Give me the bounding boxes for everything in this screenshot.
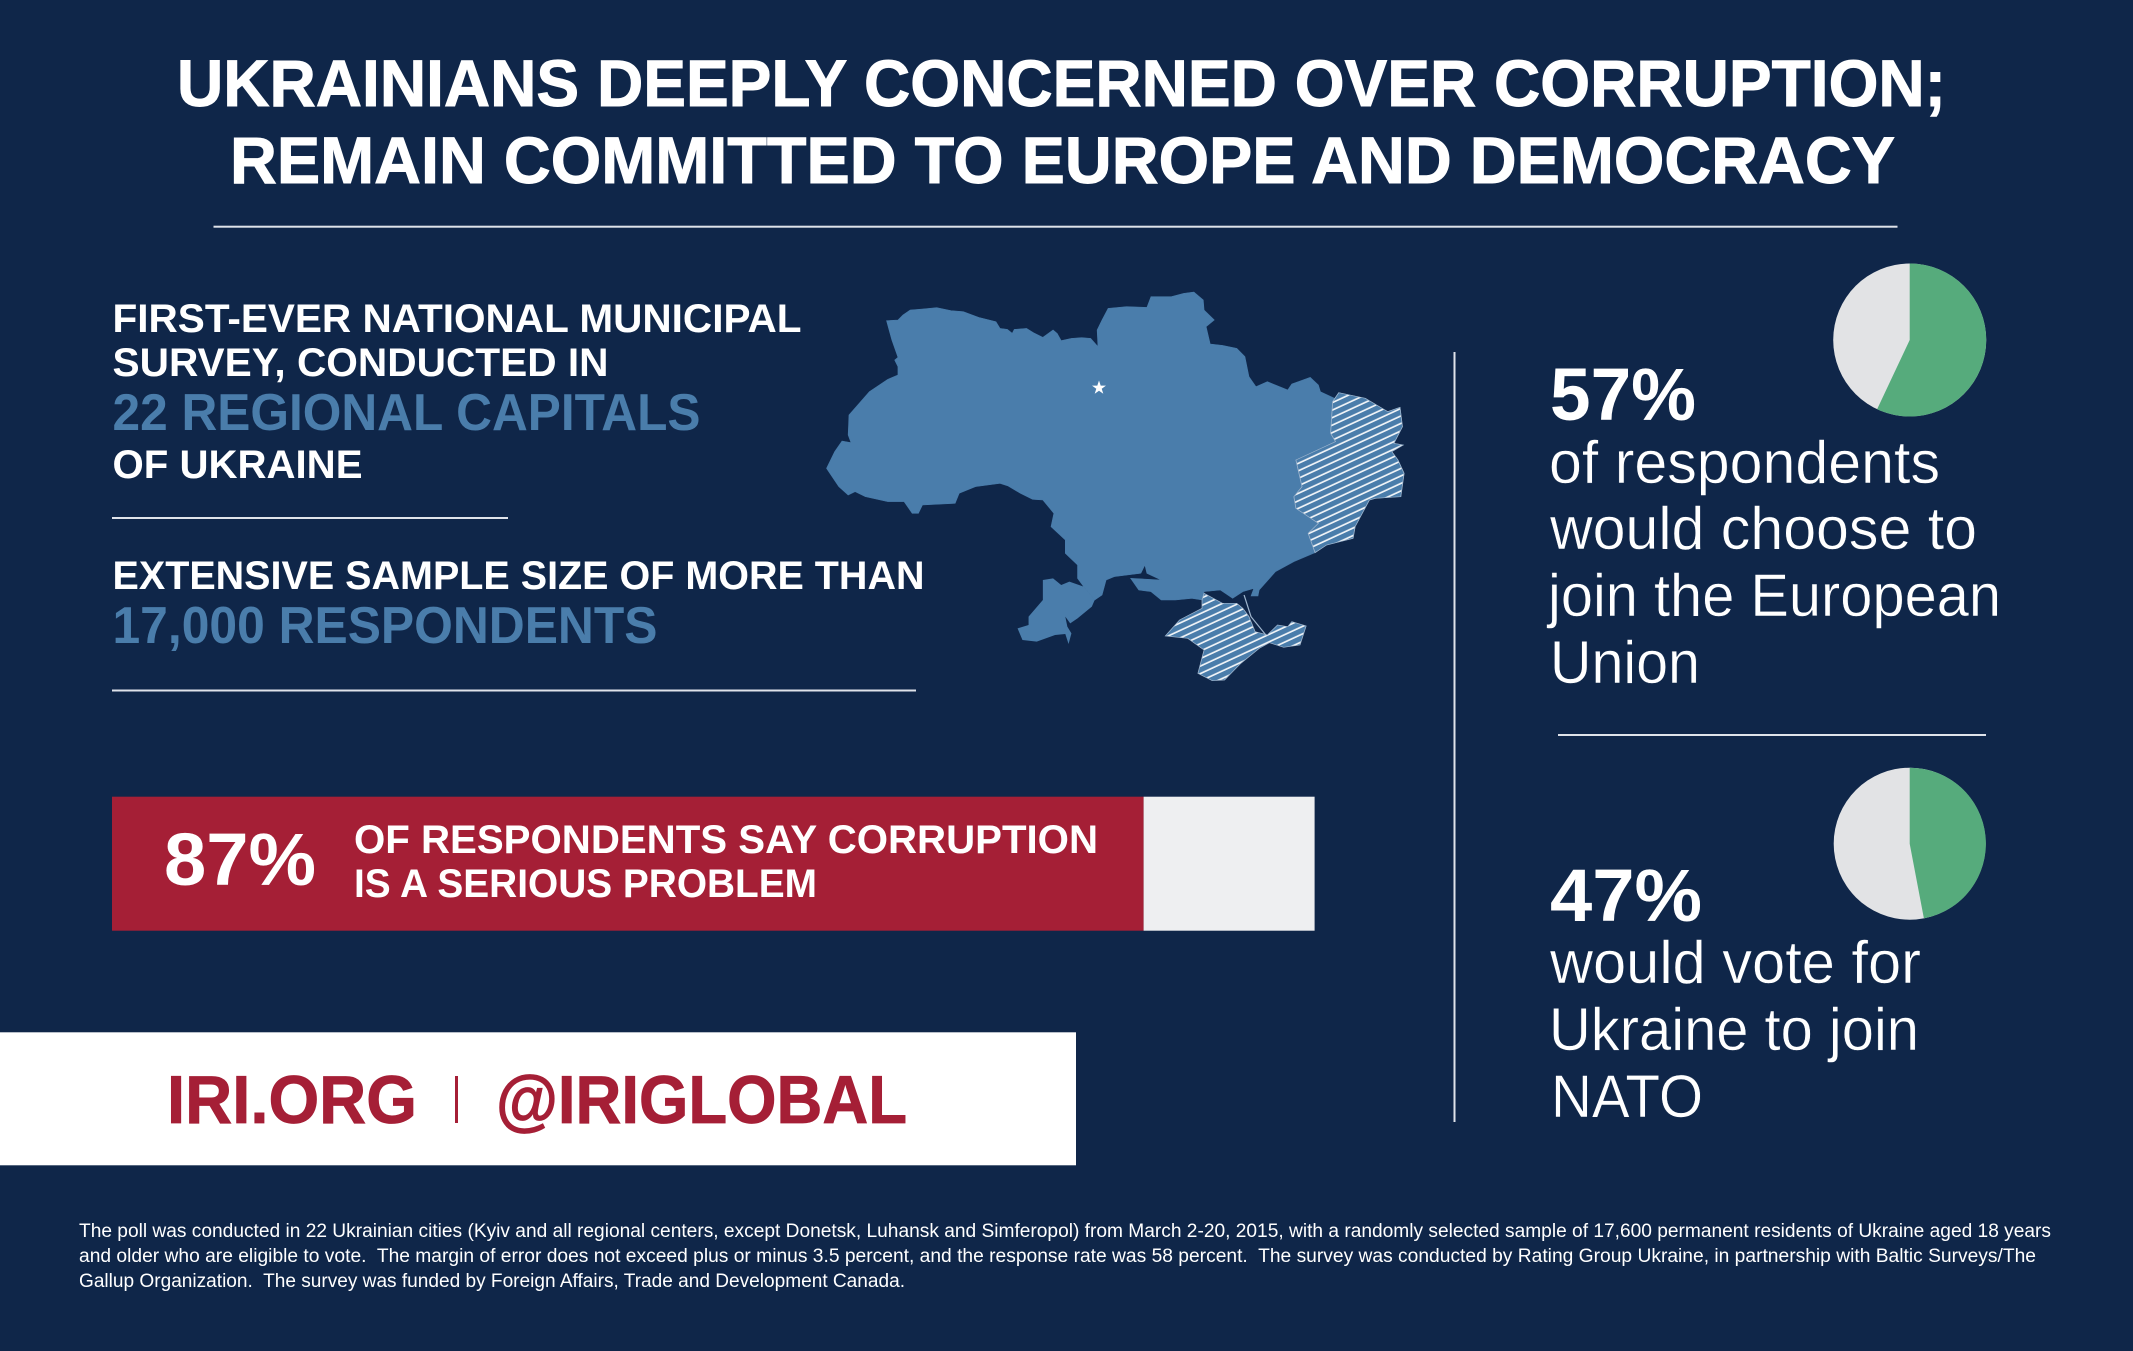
title — [177, 46, 1946, 197]
text block: sample size: EXTENSIVE SAMPLE SIZE OF MORE THAN — [112, 554, 924, 598]
footnote: Gallup Organization. The survey was funded by Foreign Affairs, Trade and Development Canada. — [79, 1271, 905, 1292]
stat: NATO 47% — [1549, 854, 1921, 1130]
stat: EU 57%: join the European — [1546, 562, 2001, 629]
text block: survey scope: SURVEY, CONDUCTED IN — [112, 341, 608, 385]
bar label: OF RESPONDENTS SAY CORRUPTION — [354, 818, 1098, 862]
map: Odesa region — [1018, 578, 1095, 644]
text block: sample size: 17,000 RESPONDENTS — [112, 597, 658, 655]
stat: EU 57%: would choose to — [1549, 495, 1977, 562]
stat: NATO 47%: would vote for — [1549, 929, 1921, 996]
stat: NATO 47%: 47% — [1550, 854, 1702, 937]
map of Ukraine — [827, 292, 1404, 681]
stat: EU 57%: Union — [1550, 629, 1700, 696]
icon: Kyiv star — [1092, 380, 1106, 394]
map: hatched eastern regions — [1294, 393, 1404, 553]
bar chart: corruption 87% — [112, 797, 1315, 931]
pie chart: 47% — [1834, 768, 1986, 920]
stat: EU 57%: 57% — [1550, 353, 1696, 436]
text block: survey scope: FIRST-EVER NATIONAL MUNICIPAL — [112, 297, 802, 341]
text block: sample size — [112, 554, 924, 655]
stat: EU 57%: of respondents — [1549, 429, 1940, 496]
panel: web and social links: IRI.ORG — [167, 1062, 417, 1138]
map: Arabat spit — [1244, 595, 1266, 635]
pie chart: 57% — [1833, 264, 1986, 416]
map: mainland — [827, 292, 1404, 600]
map: hatched Crimea — [1165, 593, 1306, 681]
bar label — [354, 818, 1098, 906]
stat: NATO 47%: NATO — [1551, 1063, 1703, 1130]
bar: remainder — [1144, 797, 1315, 931]
bar: filled portion — [112, 797, 1144, 931]
text block: survey scope — [112, 297, 802, 487]
panel: web and social links — [0, 1032, 1076, 1165]
title: UKRAINIANS DEEPLY CONCERNED OVER CORRUPTION; — [177, 46, 1946, 120]
text block: survey scope: OF UKRAINE — [112, 443, 362, 487]
footnote: and older who are eligible to vote. The margin of error does not exceed plus or minus 3.5 percent, and the response rate was 58 percent. The survey was conducted by Rating Group Ukraine, in partnership with Baltic Surveys/The — [79, 1246, 2036, 1267]
title: REMAIN COMMITTED TO EUROPE AND DEMOCRACY — [230, 123, 1895, 197]
footnote: The poll was conducted in 22 Ukrainian cities (Kyiv and all regional centers, except Donetsk, Luhansk and Simferopol) from March 2-20, 2015, with a randomly selected sample of 17,600 permanent residents of Ukraine aged 18 years — [79, 1221, 2051, 1242]
footnote — [79, 1221, 2051, 1292]
panel: web and social links: @IRIGLOBAL — [496, 1062, 907, 1138]
stat: NATO 47%: Ukraine to join — [1549, 996, 1919, 1063]
stat: EU 57% — [1546, 353, 2001, 696]
text block: survey scope: 22 REGIONAL CAPITALS — [112, 384, 700, 442]
bar value: 87% — [164, 818, 316, 901]
bar label: IS A SERIOUS PROBLEM — [354, 862, 817, 906]
